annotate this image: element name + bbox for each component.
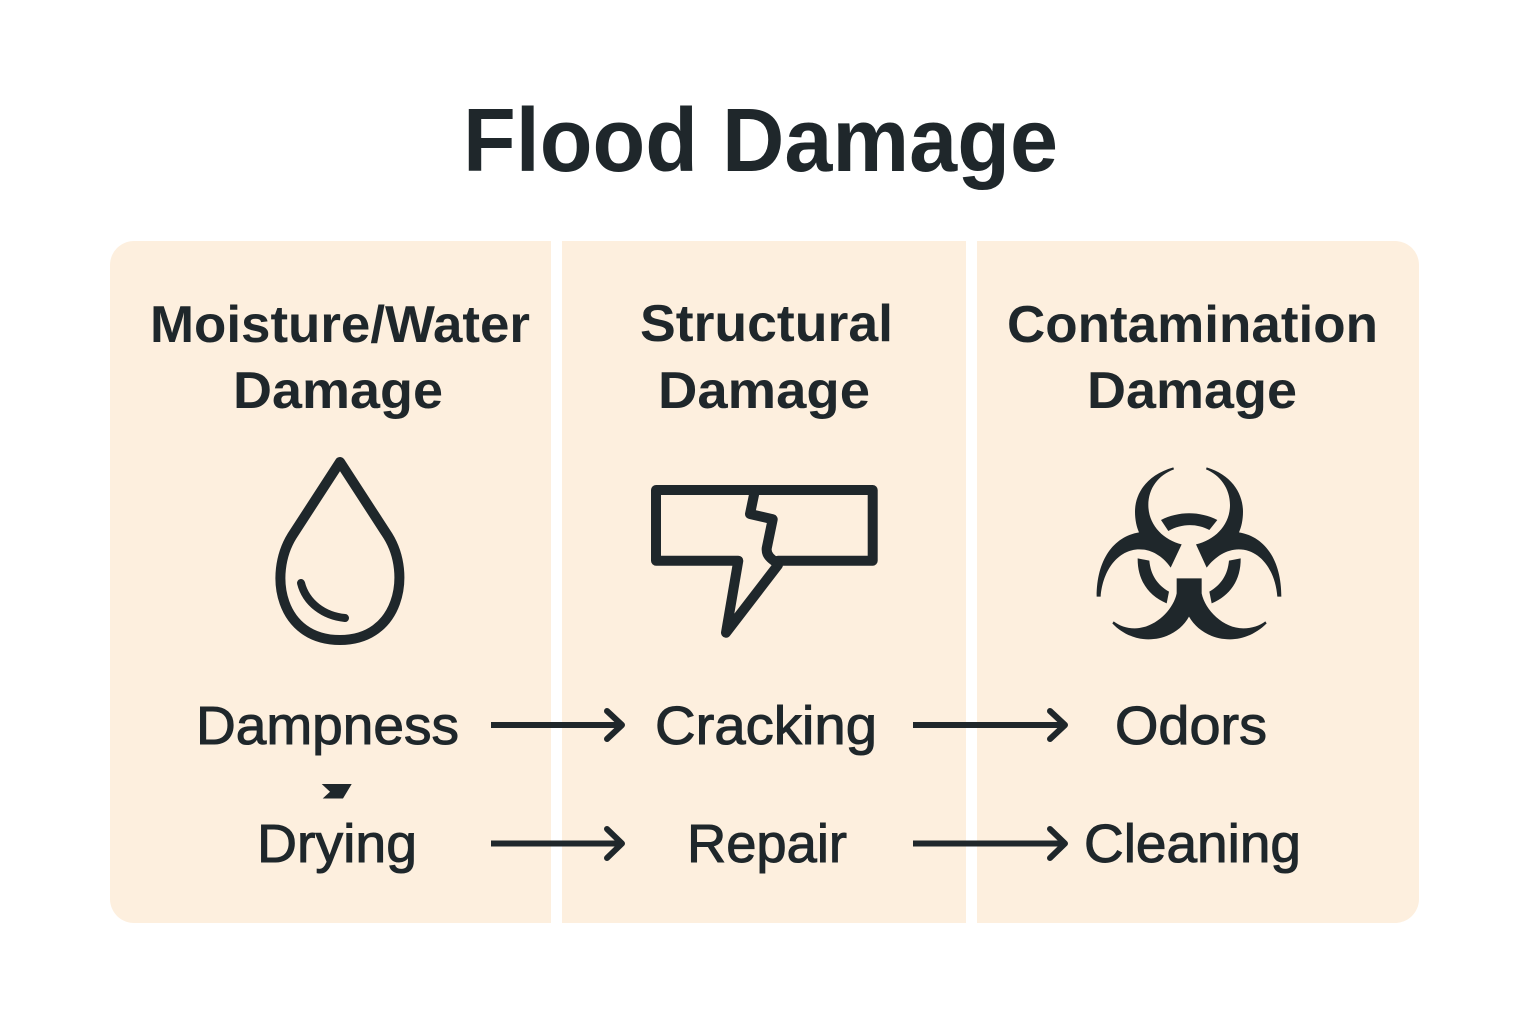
label: drying: Drying: [257, 814, 417, 874]
heading: moisture/water damage: Damage: [233, 362, 443, 420]
heading: moisture/water damage: Moisture/Water: [150, 296, 530, 354]
arrow: repair to cleaning: [913, 829, 1065, 858]
label: cracking: Cracking: [655, 696, 877, 756]
label: repair: Repair: [687, 814, 847, 874]
label: dampness: Dampness: [196, 696, 459, 756]
icon: biohazard: [1097, 467, 1281, 639]
heading: structural damage: Damage: [658, 362, 870, 420]
panel: structural damage: [562, 241, 966, 923]
arrow: cracking to odors: [913, 711, 1065, 739]
heading: moisture/water damage: [150, 296, 530, 420]
arrow: drying to repair: [491, 829, 622, 858]
arrow: dampness to cracking: [491, 711, 622, 739]
label: odors: Odors: [1115, 696, 1267, 756]
icon: cracked wall: [656, 490, 873, 633]
title: Flood Damage: [463, 91, 1058, 191]
small down marker: [322, 784, 352, 798]
heading: contamination damage: [1007, 296, 1378, 420]
heading: contamination damage: Damage: [1087, 362, 1297, 420]
heading: structural damage: [640, 295, 893, 420]
heading: contamination damage: Contamination: [1007, 296, 1378, 354]
icon: water drop: [280, 462, 399, 640]
panel: moisture/water damage: [110, 241, 551, 923]
heading: structural damage: Structural: [640, 295, 893, 353]
panel: contamination damage: [977, 241, 1419, 923]
label: cleaning: Cleaning: [1084, 814, 1301, 874]
